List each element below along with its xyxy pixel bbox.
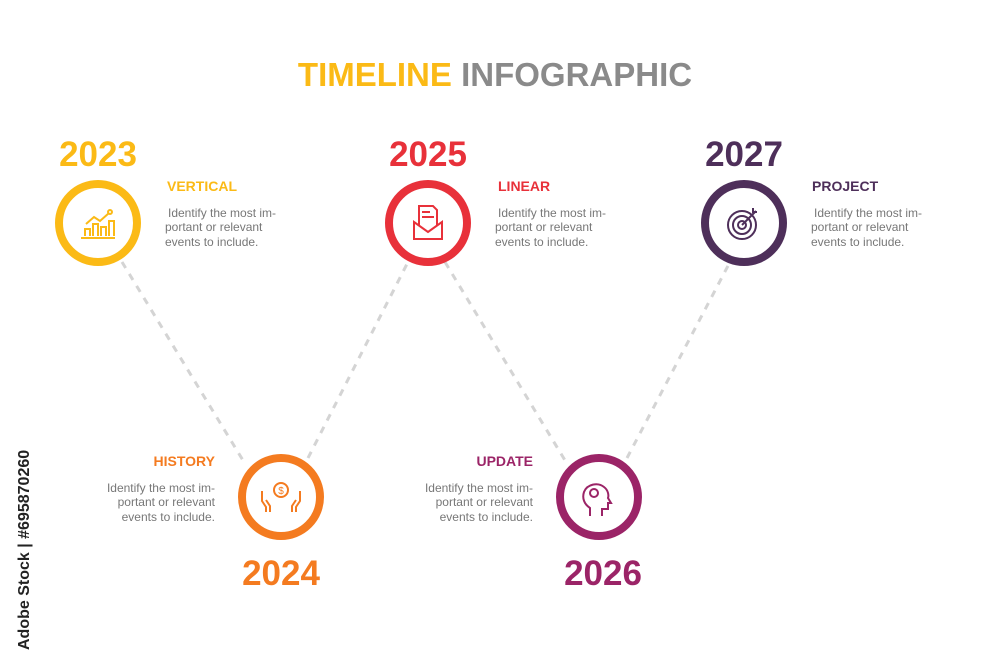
step 2027: PROJECT [812, 178, 879, 194]
step 2025: portant or relevant [495, 220, 593, 234]
icon: envelope [414, 206, 442, 239]
step 2023: VERTICAL [167, 178, 237, 194]
step 2026: events to include. [440, 510, 533, 524]
icon: head with gear [583, 484, 611, 516]
step 2026: portant or relevant [436, 495, 534, 509]
step 2024 [107, 453, 320, 593]
step 2024: Identify the most im- [107, 481, 215, 495]
connector lines [122, 262, 730, 462]
step 2024: HISTORY [154, 453, 216, 469]
icon: target [728, 208, 757, 239]
step 2023 [59, 135, 276, 262]
step 2027: events to include. [811, 235, 904, 249]
step 2023: portant or relevant [165, 220, 263, 234]
step 2027: portant or relevant [811, 220, 909, 234]
step 2025 [389, 135, 606, 262]
step 2026: UPDATE [476, 453, 533, 469]
step 2027: Identify the most im- [814, 206, 922, 220]
step 2024: 2024 [242, 554, 320, 593]
step 2023: Identify the most im- [168, 206, 276, 220]
step 2025: Identify the most im- [498, 206, 606, 220]
title: TIMELINE INFOGRAPHIC [298, 56, 692, 93]
step 2027: 2027 [705, 135, 783, 174]
step 2026: Identify the most im- [425, 481, 533, 495]
step 2025: events to include. [495, 235, 588, 249]
step 2025: LINEAR [498, 178, 550, 194]
step 2027 [705, 135, 922, 262]
step 2025: 2025 [389, 135, 467, 174]
step 2026 [425, 453, 642, 593]
step 2023: 2023 [59, 135, 137, 174]
icon: hands with coin [262, 483, 300, 512]
watermark side text: Adobe Stock | #695870260 [16, 450, 33, 650]
icon: chart [81, 210, 115, 238]
step 2024: portant or relevant [118, 495, 216, 509]
icon: hands with coin: $ [278, 486, 284, 497]
step 2023: events to include. [165, 235, 258, 249]
step 2026: 2026 [564, 554, 642, 593]
step 2024: events to include. [122, 510, 215, 524]
